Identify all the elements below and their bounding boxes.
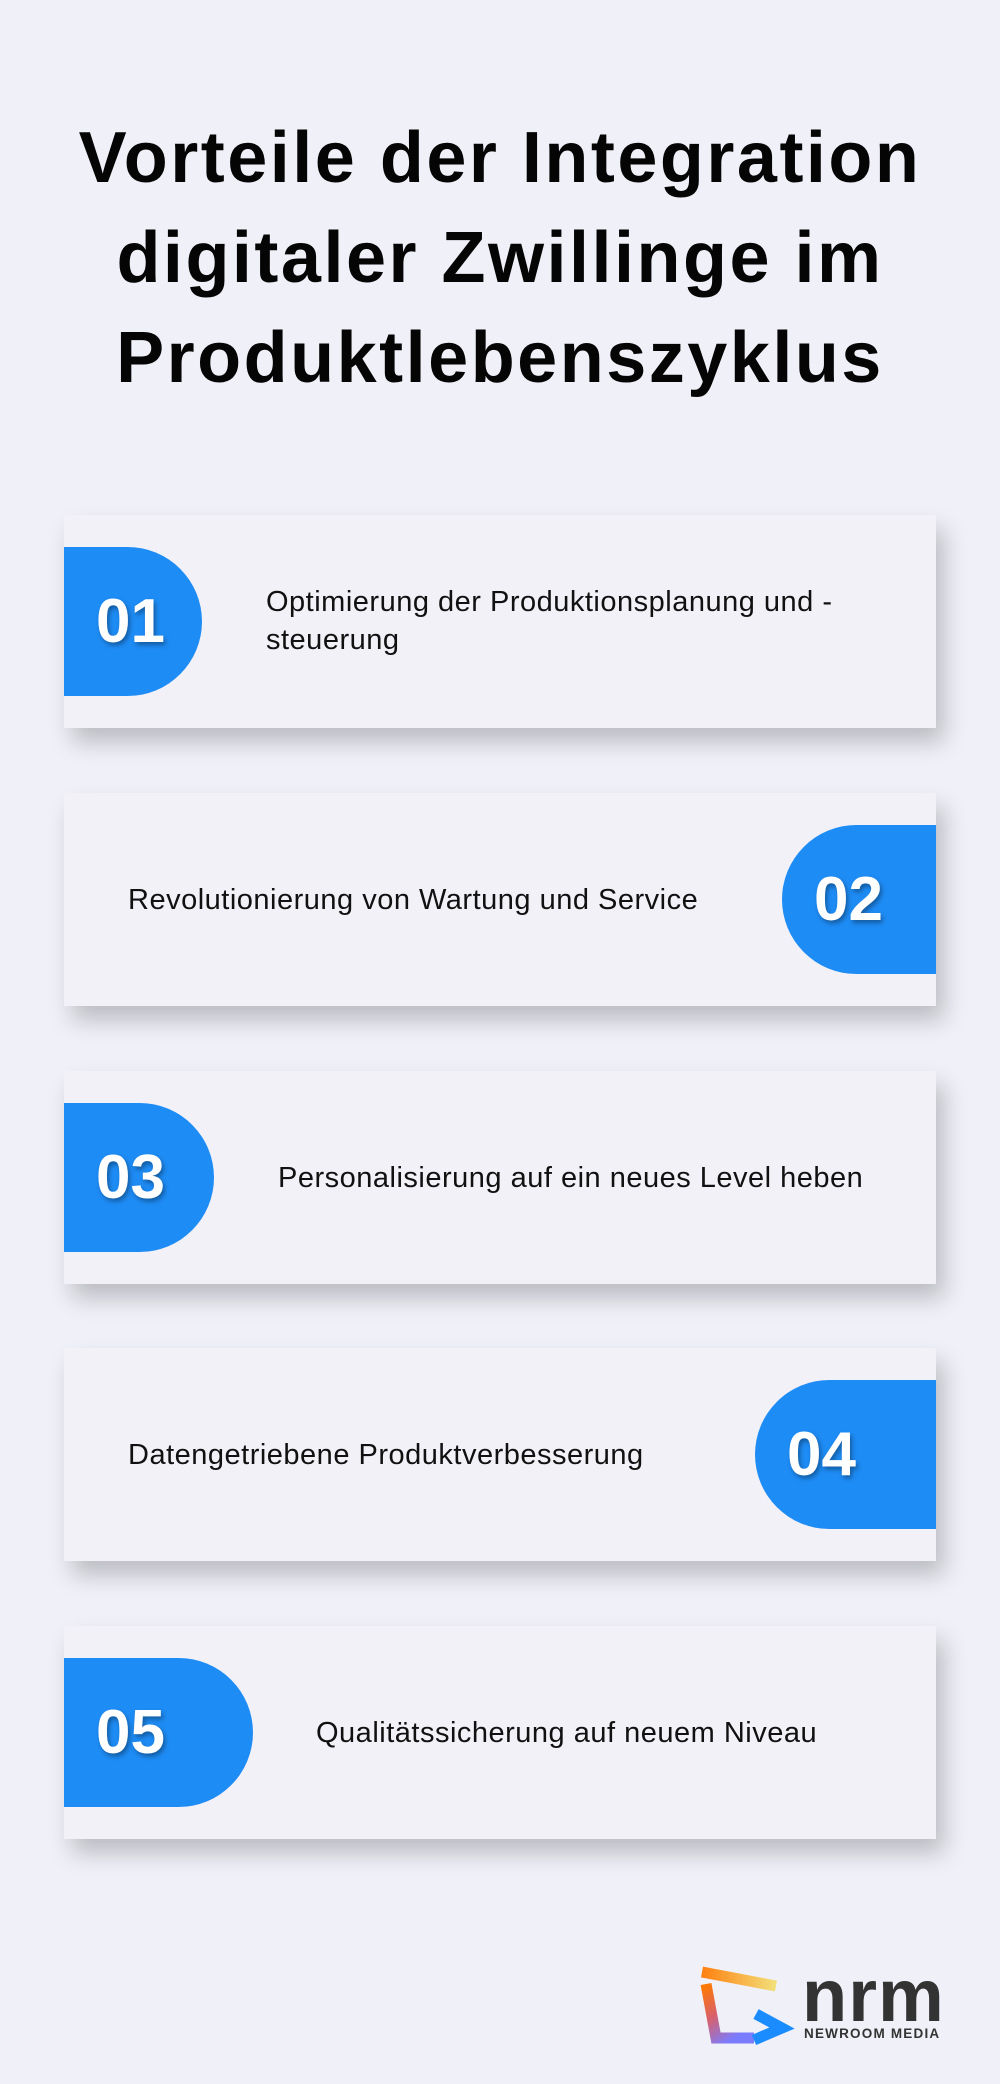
- badge 05: 05: [96, 1698, 165, 1767]
- badge 04: 04: [787, 1420, 856, 1489]
- title: digitaler Zwillinge im: [116, 218, 884, 298]
- badge 04: [755, 1380, 936, 1529]
- text 01: Optimierung der Produktionsplanung und -: [266, 586, 832, 618]
- badge 02: [782, 825, 936, 974]
- badge 01: 01: [96, 587, 165, 656]
- title: [79, 118, 921, 398]
- title: Produktlebenszyklus: [116, 318, 884, 398]
- logo: NEWROOM MEDIA: [804, 2026, 940, 2041]
- badge 05: [64, 1658, 253, 1807]
- panel: card 05: [64, 1626, 936, 1839]
- text 01: steuerung: [266, 624, 400, 656]
- panel: card 02: [64, 793, 936, 1006]
- badge 03: 03: [96, 1143, 165, 1212]
- text 05: Qualitätssicherung auf neuem Niveau: [316, 1717, 817, 1749]
- badge 03: [64, 1103, 214, 1252]
- icon: nrm logo mark: [700, 1966, 794, 2045]
- badge 01: [64, 547, 202, 696]
- title: Vorteile der Integration: [79, 118, 921, 198]
- panel: card 01: [64, 515, 936, 728]
- text 04: Datengetriebene Produktverbesserung: [128, 1439, 644, 1471]
- badge 02: 02: [814, 865, 883, 934]
- text 01: [266, 586, 832, 656]
- text 03: Personalisierung auf ein neues Level heben: [278, 1162, 863, 1194]
- panel: card 03: [64, 1071, 936, 1284]
- panel: card 04: [64, 1348, 936, 1561]
- logo: [700, 1954, 945, 2045]
- text 02: Revolutionierung von Wartung und Service: [128, 884, 698, 916]
- logo text: nrm: [802, 1954, 945, 2037]
